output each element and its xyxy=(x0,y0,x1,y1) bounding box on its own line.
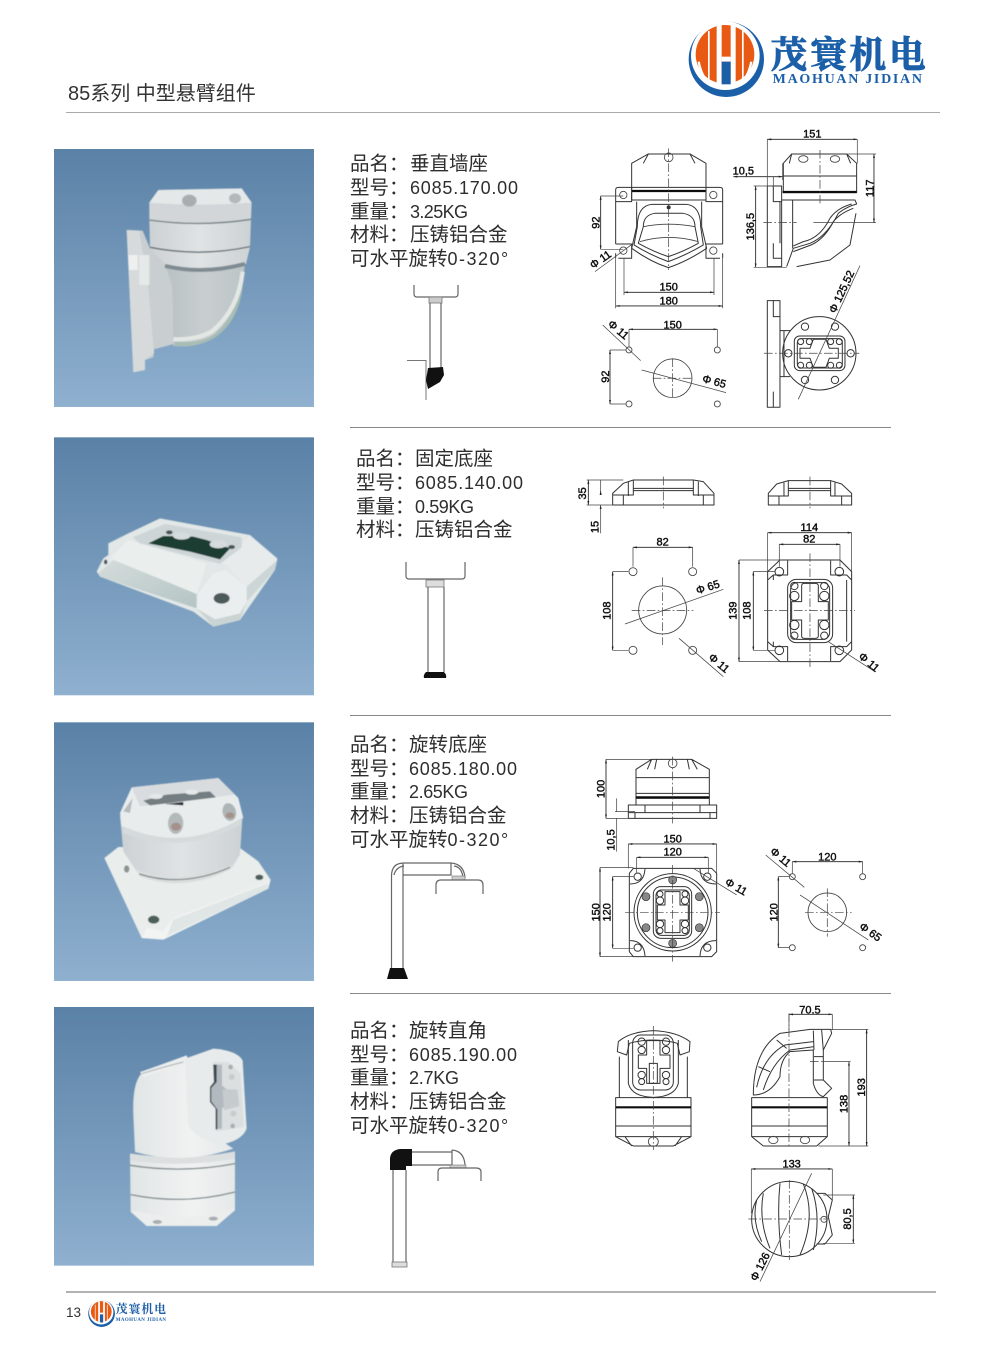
drawing: front view: 150 xyxy=(659,282,678,294)
drawing: top view: 120 xyxy=(602,903,614,921)
drawing: top view: 114 xyxy=(801,522,818,534)
drawing: side view: 117 xyxy=(864,180,876,197)
drawing: top view: 120 xyxy=(663,847,682,859)
drawing: top view xyxy=(728,522,881,675)
specifications: 垂直墙座: 3.25KG xyxy=(410,202,468,222)
drawing: side view: 70.5 xyxy=(799,1004,821,1016)
drawing: top view: 82 xyxy=(803,533,815,545)
drawing: front view: 180 xyxy=(659,296,678,308)
drawing: hole pattern xyxy=(602,536,731,677)
drawing: top view: 150 xyxy=(590,903,602,921)
drawing: hole pattern: Φ 11 xyxy=(767,846,793,870)
drawing: side views: 35 xyxy=(577,487,589,499)
drawing: hole pattern: 120 xyxy=(768,903,780,921)
drawing: side view xyxy=(596,757,717,852)
drawing: bottom view: 133 xyxy=(782,1159,801,1171)
specifications: 旋转底座: 旋转底座 xyxy=(409,734,487,756)
mounting diagram: 垂直墙座 xyxy=(407,285,458,400)
mounting diagram: 旋转直角 xyxy=(390,1149,481,1267)
specifications: 旋转直角: 旋转直角 xyxy=(409,1020,487,1042)
drawing: top view: 150 xyxy=(663,833,682,845)
specifications: 旋转底座: 6085.180.00 xyxy=(409,759,517,779)
drawing: hole pattern: 150 xyxy=(663,319,682,331)
drawing: hole pattern: 120 xyxy=(818,852,836,864)
specifications: 旋转底座: 材料： xyxy=(350,805,409,827)
brand logo: MAOHUAN JIDIAN xyxy=(773,72,922,87)
drawing: front view: Φ 11 xyxy=(588,249,614,272)
drawing: side view: 100 xyxy=(596,780,608,798)
footer logo: 茂寰机电 xyxy=(116,1300,166,1317)
specifications: 旋转底座: 型号： xyxy=(350,758,409,780)
drawing: underside view: Φ 125,52 xyxy=(827,269,857,315)
specifications: 垂直墙座: 重量： xyxy=(350,201,409,223)
specifications: 旋转底座: 可水平旋转0-320° xyxy=(350,829,510,851)
specifications: 旋转直角: 材料： xyxy=(350,1091,409,1113)
drawing: hole pattern: Φ 65 xyxy=(695,578,721,597)
mounting diagram: 旋转底座 xyxy=(387,863,483,979)
brand logo xyxy=(689,21,926,97)
technical drawings: 固定底座 xyxy=(577,477,881,677)
specifications: 旋转底座: 品名： xyxy=(350,734,409,756)
specifications: 垂直墙座 xyxy=(350,153,518,270)
specifications: 旋转直角: 型号： xyxy=(350,1044,409,1066)
technical drawings: 旋转底座 xyxy=(590,757,883,962)
specifications: 固定底座: 品名： xyxy=(356,448,415,470)
mounting diagram: 固定底座 xyxy=(406,562,465,678)
product photo: 固定底座 xyxy=(54,437,314,695)
drawing: side view: 193 xyxy=(856,1078,868,1096)
technical drawings: 旋转直角 xyxy=(616,1004,868,1283)
footer xyxy=(66,1292,936,1327)
drawing: hole pattern: Φ 11 xyxy=(605,318,631,342)
drawing: side views xyxy=(577,477,852,533)
drawing: side views: 15 xyxy=(590,521,602,533)
drawing: hole pattern xyxy=(600,318,727,407)
panel: 固定底座 xyxy=(54,437,881,695)
drawing: side view xyxy=(733,129,876,267)
specifications: 旋转直角: 可水平旋转0-320° xyxy=(350,1115,510,1137)
specifications: 旋转底座 xyxy=(350,734,517,851)
technical drawings: 垂直墙座 xyxy=(588,129,876,407)
drawing: side view: 10,5 xyxy=(733,166,754,178)
drawing: hole pattern: Φ 65 xyxy=(857,921,883,944)
specifications: 垂直墙座: 可水平旋转0-320° xyxy=(350,248,510,270)
specifications: 垂直墙座: 材料： xyxy=(350,224,409,246)
specifications: 旋转直角: 6085.190.00 xyxy=(409,1045,517,1065)
specifications: 垂直墙座: 压铸铝合金 xyxy=(410,224,508,246)
drawing: side view: 151 xyxy=(803,129,821,141)
specifications: 旋转直角: 品名： xyxy=(350,1020,409,1042)
specifications: 固定底座 xyxy=(356,448,523,541)
drawing: bottom view: Φ 126 xyxy=(748,1251,773,1283)
drawing: hole pattern: Φ 11 xyxy=(706,652,731,676)
drawing: top view: Φ 11 xyxy=(856,651,881,675)
specifications: 旋转底座: 重量： xyxy=(350,781,409,803)
drawing: top view xyxy=(590,833,749,962)
product photo: 旋转底座 xyxy=(54,722,314,981)
specifications: 旋转直角: 2.7KG xyxy=(409,1068,459,1088)
specifications: 垂直墙座: 6085.170.00 xyxy=(410,178,518,198)
specifications: 垂直墙座: 垂直墙座 xyxy=(410,153,488,175)
specifications: 旋转直角 xyxy=(350,1020,517,1137)
drawing: top view: 139 xyxy=(728,601,740,620)
panel: 旋转直角 xyxy=(54,1004,868,1283)
drawing: side view: 138 xyxy=(838,1095,850,1113)
brand logo: 茂寰机电 xyxy=(771,26,926,78)
drawing: side view: 10,5 xyxy=(606,829,618,851)
drawing: bottom view xyxy=(748,1159,855,1283)
panel: 垂直墙座 xyxy=(54,129,876,407)
drawing: front view xyxy=(616,1026,691,1150)
specifications: 旋转直角: 重量： xyxy=(350,1067,409,1089)
drawing: hole pattern: 108 xyxy=(602,601,614,620)
specifications: 垂直墙座: 品名： xyxy=(350,153,409,175)
drawing: hole pattern xyxy=(766,846,883,951)
specifications: 固定底座: 固定底座 xyxy=(415,448,493,470)
drawing: front view xyxy=(588,148,723,308)
drawing: top view: Φ 11 xyxy=(723,876,749,898)
specifications: 固定底座: 材料： xyxy=(356,519,415,541)
specifications: 垂直墙座: 型号： xyxy=(350,177,409,199)
panel: 旋转底座 xyxy=(54,722,883,981)
specifications: 固定底座: 重量： xyxy=(356,496,415,518)
drawing: front view: 92 xyxy=(590,217,602,229)
page number: 13 xyxy=(66,1305,81,1320)
specifications: 旋转直角: 压铸铝合金 xyxy=(409,1091,507,1113)
specifications: 固定底座: 0.59KG xyxy=(415,497,474,517)
specifications: 固定底座: 6085.140.00 xyxy=(415,473,523,493)
footer logo xyxy=(88,1300,166,1327)
drawing: hole pattern: 92 xyxy=(600,371,612,383)
drawing: hole pattern: 82 xyxy=(657,536,669,548)
specifications: 旋转底座: 2.65KG xyxy=(409,782,468,802)
specifications: 旋转底座: 压铸铝合金 xyxy=(409,805,507,827)
section title: 85系列 中型悬臂组件 xyxy=(68,82,256,105)
specifications: 固定底座: 型号： xyxy=(356,472,415,494)
drawing: hole pattern: Φ 65 xyxy=(701,373,727,391)
product photo: 垂直墙座 xyxy=(54,149,314,407)
drawing: side view xyxy=(752,1004,868,1148)
specifications: 固定底座: 压铸铝合金 xyxy=(415,519,513,541)
drawing: top view: 108 xyxy=(742,601,754,620)
product photo: 旋转直角 xyxy=(54,1007,314,1266)
drawing: side view: 136,5 xyxy=(745,213,757,240)
drawing: underside view xyxy=(764,266,860,407)
drawing: bottom view: 80,5 xyxy=(842,1208,854,1230)
footer logo: MAOHUAN JIDIAN xyxy=(116,1318,166,1323)
